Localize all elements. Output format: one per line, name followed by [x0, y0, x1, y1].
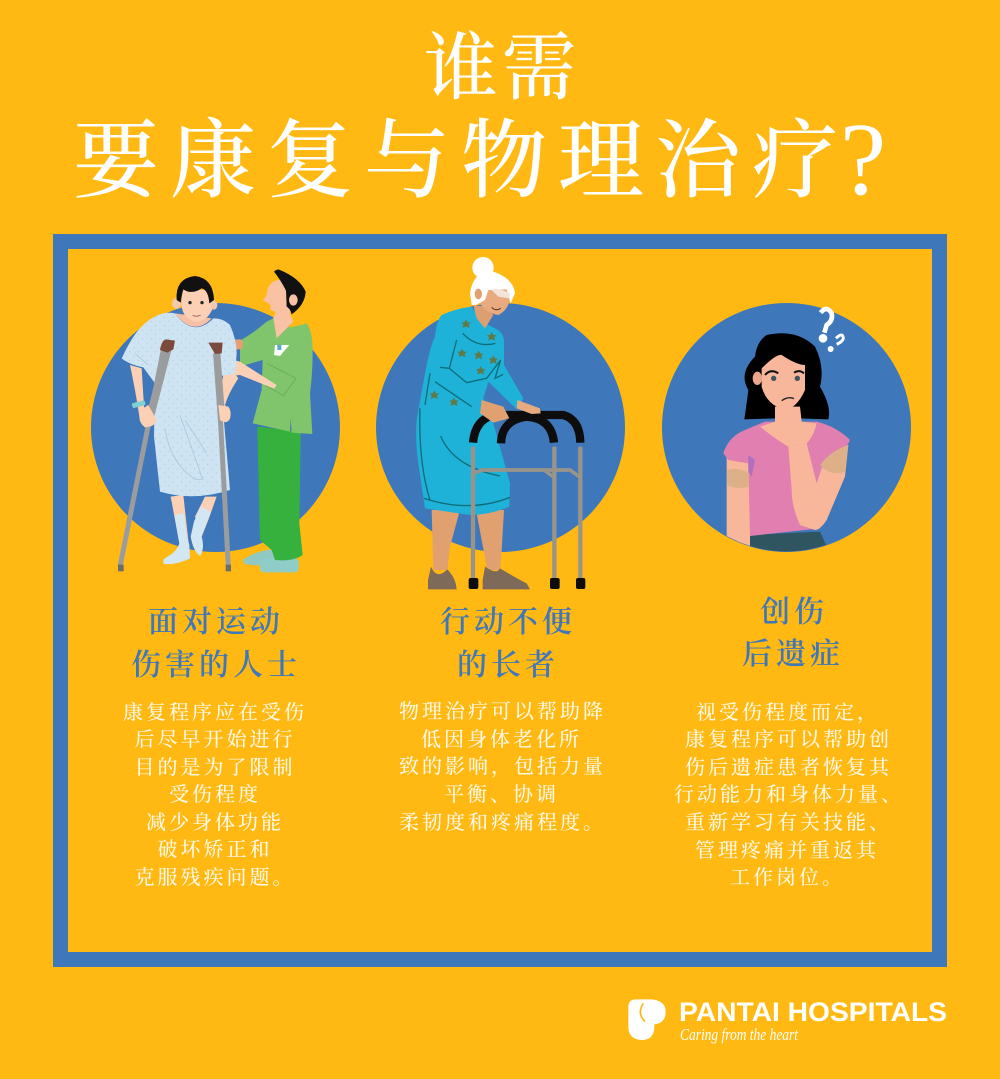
column 3 body text: 行动能力和身体力量、 — [674, 783, 904, 806]
logo: Pantai Hospitals — [628, 997, 947, 1044]
column 2 body text: 物理治疗可以帮助降 — [399, 700, 606, 723]
column 3 body text: 康复程序可以帮助创 — [685, 728, 892, 751]
column 2 heading — [440, 606, 576, 682]
illustration: worried woman with question marks — [662, 303, 911, 553]
title — [73, 28, 886, 217]
column 1 heading: 面对运动 — [148, 606, 284, 639]
column 3 body text — [674, 701, 904, 889]
illustration: patient on crutches with nurse — [91, 269, 340, 572]
column 3 body text: 重新学习有关技能、 — [685, 811, 892, 834]
logo: Pantai Hospitals: Caring from the heart — [680, 1025, 799, 1044]
walker — [469, 415, 585, 589]
column 2 heading: 的长者 — [457, 649, 559, 682]
dress — [416, 307, 523, 515]
column 3 heading: 后遗症 — [742, 638, 844, 671]
column 1 body text: 破坏矫正和 — [158, 838, 272, 861]
blue frame panel — [60, 242, 940, 960]
column 1 body text: 后尽早开始进行 — [134, 728, 296, 751]
nurse — [218, 269, 313, 572]
column 1 heading — [131, 606, 301, 682]
column 3 body text: 伤后遗症患者恢复其 — [685, 756, 892, 779]
column 1 body text: 克服残疾问题。 — [134, 866, 296, 889]
title: ? — [840, 102, 886, 217]
column 2 heading: 行动不便 — [440, 606, 576, 639]
column 1 body text: 受伤程度 — [169, 783, 261, 806]
column 2 body text: 平衡、协调 — [444, 783, 559, 806]
illustration: elderly woman with walker — [376, 257, 625, 589]
column 1 heading: 伤害的人士 — [131, 649, 301, 682]
column 3 heading — [742, 596, 844, 671]
column 1 body text: 减少身体功能 — [146, 811, 284, 834]
column 3 body text: 管理疼痛并重返其 — [695, 839, 879, 862]
head and hair — [473, 305, 493, 328]
patient — [118, 276, 238, 571]
column 3 heading: 创伤 — [760, 596, 828, 629]
title: 谁需 — [424, 28, 580, 110]
column 1 body text — [123, 701, 307, 889]
column 2 body text: 致的影响，包括力量 — [399, 755, 606, 778]
column 2 body text — [399, 700, 606, 834]
logo: Pantai Hospitals: PANTAI HOSPITALS — [679, 997, 947, 1027]
column 3 body text: 工作岗位。 — [730, 866, 845, 889]
column 2 body text: 低因身体老化所 — [421, 728, 582, 751]
title: 要康复与物理治疗 — [73, 113, 849, 209]
icon: question marks — [819, 309, 843, 352]
column 3 body text: 视受伤程度而定， — [696, 701, 880, 724]
column 2 body text: 柔韧度和疼痛程度。 — [399, 811, 606, 834]
column 1 body text: 目的是为了限制 — [134, 756, 296, 779]
column 1 body text: 康复程序应在受伤 — [123, 701, 307, 724]
icon: P mark — [628, 999, 666, 1040]
